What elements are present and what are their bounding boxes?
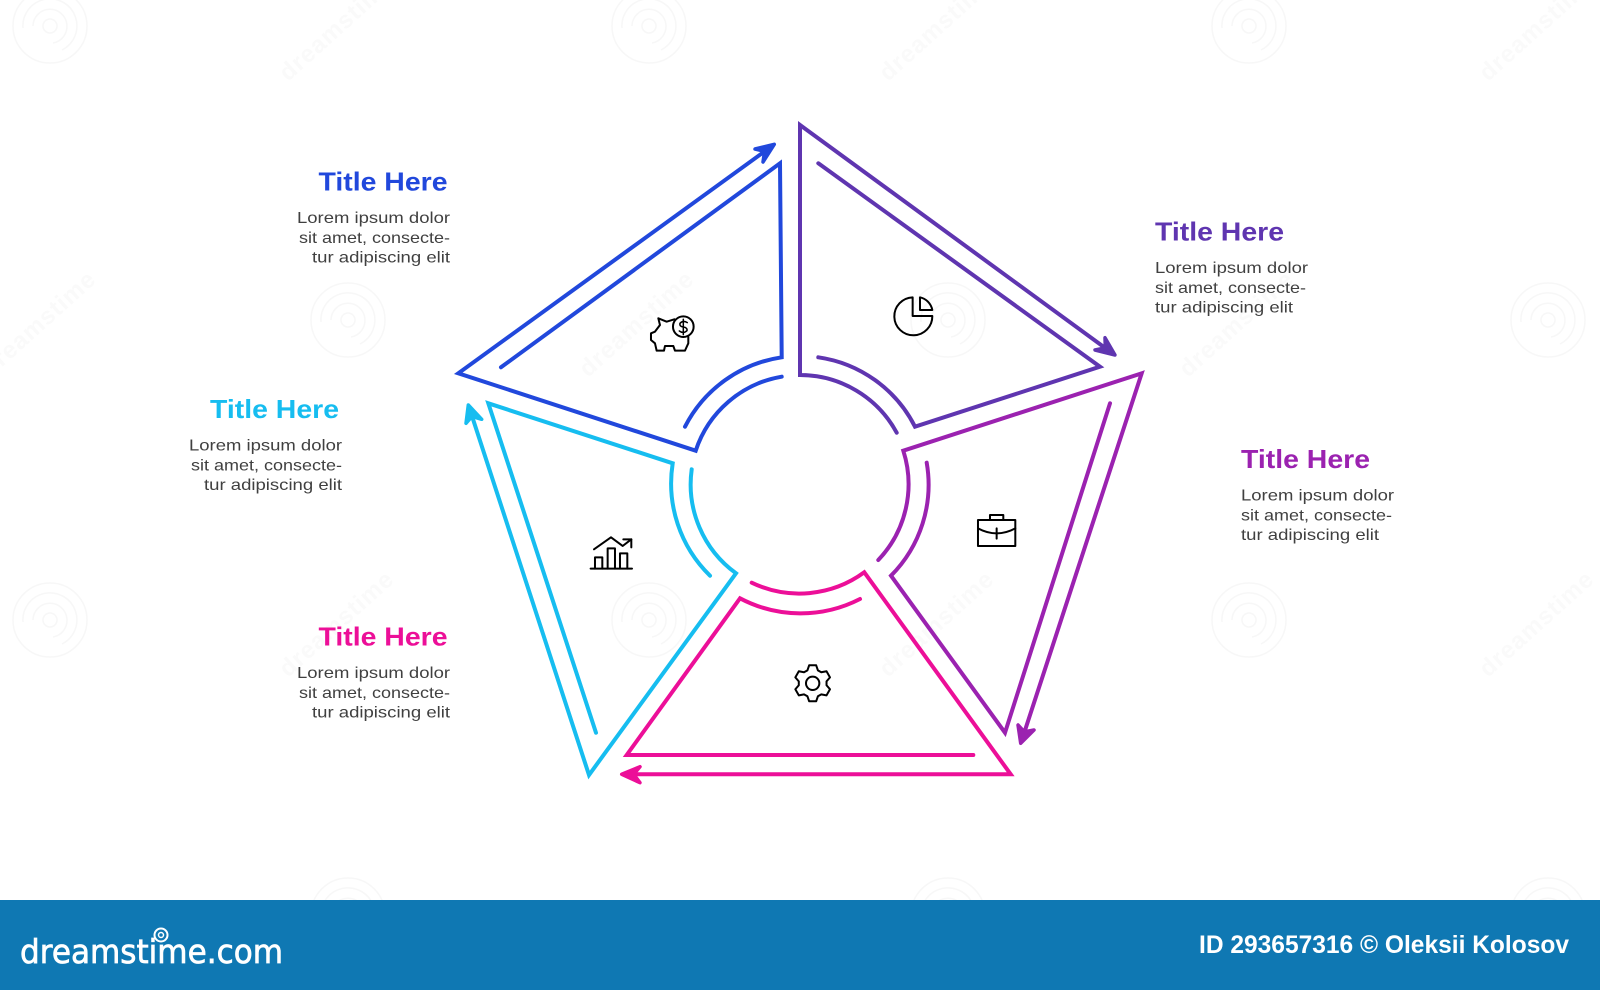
text block: violet title and body [1241, 444, 1395, 544]
text block: cyan title and body: sit amet, consecte- [191, 458, 342, 474]
text block: violet title and body: Lorem ipsum dolor [1241, 488, 1395, 504]
arrowhead: cyan [466, 405, 482, 423]
segment: blue [458, 144, 782, 451]
icon: briefcase [978, 515, 1015, 546]
text block: magenta title and body [297, 622, 451, 722]
text block: violet title and body: sit amet, consecte- [1241, 508, 1392, 524]
text block: violet title and body: Title Here [1241, 444, 1370, 474]
segment: violet [878, 373, 1142, 743]
text block: blue title and body [297, 166, 451, 266]
text block: violet title and body: tur adipiscing elit [1241, 527, 1380, 544]
text block: purple title and body: Title Here [1155, 216, 1284, 246]
segment: magenta [622, 572, 1011, 783]
text block: purple title and body [1155, 216, 1309, 316]
text block: magenta title and body: Lorem ipsum dolor [297, 665, 451, 682]
text block: cyan title and body: Lorem ipsum dolor [189, 438, 343, 454]
text block: cyan title and body: tur adipiscing elit [204, 477, 343, 494]
arrowhead: purple [1095, 338, 1115, 355]
watermark background: dreamstime [574, 266, 700, 382]
text block: blue title and body: Title Here [318, 166, 448, 196]
watermark background: dreamstime [1174, 266, 1300, 382]
text block: cyan title and body [189, 394, 343, 494]
arrowhead: magenta [622, 767, 640, 783]
watermark background: dreamstime [274, 566, 400, 682]
text block: magenta title and body: Title Here [318, 622, 448, 652]
watermark background: dreamstime [874, 566, 1000, 682]
footer band [0, 900, 1600, 990]
text block: blue title and body: sit amet, consecte- [299, 230, 450, 247]
footer credit: ID 293657316 © Oleksii Kolosov [1199, 931, 1569, 959]
arrowhead: violet [1018, 725, 1034, 743]
text block: purple title and body: sit amet, consecte- [1155, 280, 1306, 297]
icon: gear [795, 665, 830, 701]
text block: cyan title and body: Title Here [210, 394, 339, 424]
watermark background: dreamstime [1474, 566, 1600, 682]
icon: bar chart with arrow [591, 537, 632, 569]
segment: cyan [466, 403, 736, 775]
text block: purple title and body: Lorem ipsum dolor [1155, 260, 1309, 277]
text block: blue title and body: tur adipiscing elit [312, 250, 451, 266]
icon: piggy bank [651, 316, 694, 351]
arrowhead: blue [755, 144, 774, 162]
text block: magenta title and body: tur adipiscing elit [312, 704, 451, 722]
footer logo: dreamstime.com [20, 932, 283, 971]
icon: pie chart [894, 297, 932, 335]
segment: purple [800, 125, 1115, 433]
text block: blue title and body: Lorem ipsum dolor [297, 210, 451, 227]
text block: purple title and body: tur adipiscing elit [1155, 300, 1294, 316]
text block: magenta title and body: sit amet, consecte- [299, 685, 450, 702]
